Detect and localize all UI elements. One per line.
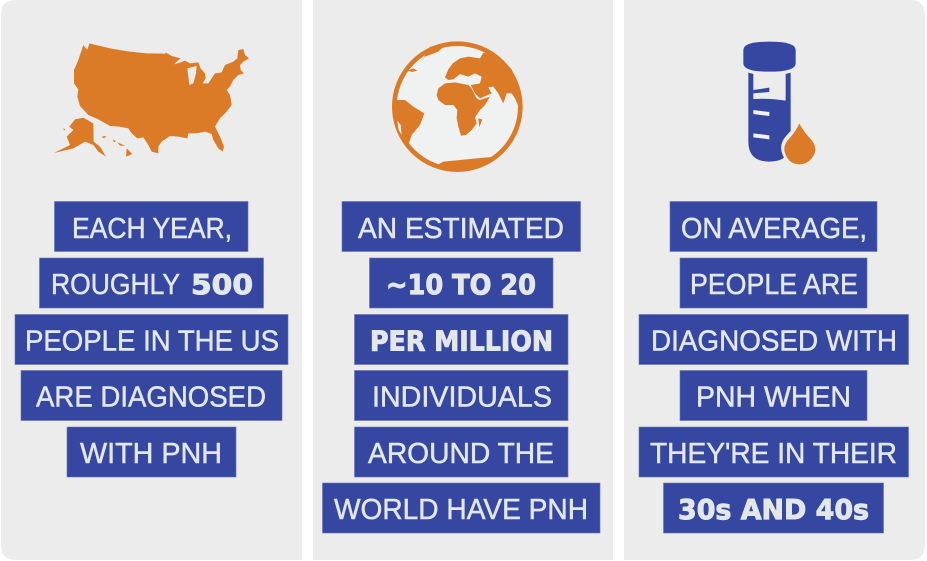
text block: each year: WITH PNH <box>80 438 222 470</box>
text block: average age: DIAGNOSED WITH <box>651 326 897 358</box>
text block: estimated prevalence: PER MILLION <box>370 324 553 358</box>
panel: age at diagnosis <box>624 0 925 560</box>
text block: estimated prevalence: AN ESTIMATED <box>358 213 564 245</box>
text block: each year: EACH YEAR, <box>72 213 232 245</box>
text block: average age: PNH WHEN <box>696 382 851 414</box>
text block: each year: 500 <box>191 268 253 301</box>
text block: estimated prevalence: ~10 TO 20 <box>386 268 536 301</box>
text block: average age: PEOPLE ARE <box>690 269 858 301</box>
text block: estimated prevalence: INDIVIDUALS <box>372 382 552 414</box>
icon: test tube with blood drop <box>743 42 818 167</box>
text block: average age: 30s AND 40s <box>678 493 869 526</box>
text block: average age: ON AVERAGE, <box>681 213 867 245</box>
text block: average age: THEY'RE IN THEIR <box>650 438 897 470</box>
text block: estimated prevalence <box>322 202 600 533</box>
text block: average age <box>639 202 908 533</box>
text block: estimated prevalence: AROUND THE <box>368 438 554 470</box>
text block: each year <box>15 202 288 477</box>
icon: globe <box>394 44 521 170</box>
text block: estimated prevalence: WORLD HAVE PNH <box>334 494 588 526</box>
text block: each year: ARE DIAGNOSED <box>36 382 266 414</box>
icon: map of the United States <box>54 43 249 157</box>
text block: each year: PEOPLE IN THE US <box>25 326 279 358</box>
text block: each year: ROUGHLY <box>51 269 180 301</box>
panel: worldwide prevalence <box>313 0 613 560</box>
panel: US incidence <box>1 0 302 560</box>
